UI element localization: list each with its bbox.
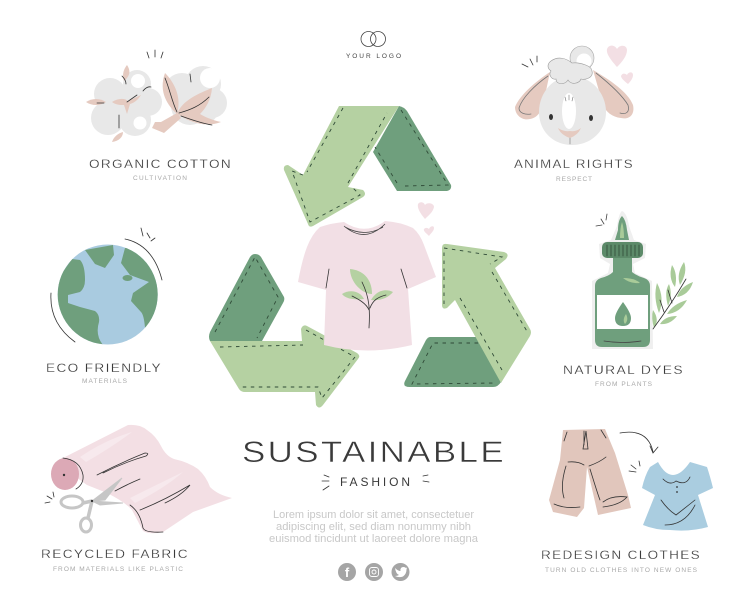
body text [269, 509, 479, 545]
title: SUSTAINABLE [242, 436, 506, 469]
icon: sheep [515, 46, 633, 145]
icon: blue blouse [642, 462, 713, 531]
logo: YOUR LOGO [346, 53, 401, 60]
icon: facebook: f [345, 565, 350, 580]
subtitle: FASHION [340, 475, 410, 489]
heading: redesign clothes: REDESIGN CLOTHES [541, 548, 701, 562]
caption: from materials like plastic: FROM MATERIALS LIKE PLASTIC [53, 566, 183, 573]
icon: instagram [365, 563, 383, 581]
title [242, 436, 506, 490]
body text: Lorem ipsum dolor sit amet, consectetuer [273, 509, 474, 521]
icon: hearts [607, 46, 633, 84]
icon: dye bottle [592, 211, 693, 349]
icon: fabric roll and scissors [45, 425, 232, 533]
arrow: top [284, 106, 451, 227]
icon: globe [50, 228, 175, 345]
icon: t-shirt with leaf [298, 202, 436, 350]
icon: pants [549, 429, 631, 517]
heading: eco friendly: ECO FRIENDLY [46, 361, 162, 375]
icon: branch [652, 262, 693, 329]
arrow: right [404, 244, 531, 387]
icon: twitter [392, 563, 410, 581]
panel: animal rights [514, 46, 634, 183]
caption: turn old clothes into new ones: TURN OLD CLOTHES INTO NEW ONES [545, 567, 698, 574]
icon: cotton bolls [86, 50, 227, 142]
icon: hearts above shirt [418, 202, 434, 236]
body text: euismod tincidunt ut laoreet dolore magna [269, 533, 479, 545]
heading: organic cotton: ORGANIC COTTON [89, 157, 232, 171]
caption: materials: MATERIALS [82, 378, 128, 385]
panel: eco friendly [47, 228, 162, 383]
caption: from plants: FROM PLANTS [595, 381, 653, 388]
caption: respect: RESPECT [556, 176, 592, 183]
caption: cultivation: CULTIVATION [133, 175, 187, 182]
panel: redesign clothes [541, 429, 713, 574]
panel: natural dyes [563, 211, 693, 388]
heading: animal rights: ANIMAL RIGHTS [514, 157, 634, 171]
recycling arrows [209, 106, 531, 408]
heading: recycled fabric: RECYCLED FABRIC [41, 547, 189, 561]
icon: scissors [61, 478, 123, 532]
body text: adipiscing elit, sed diam nonummy nibh [276, 521, 471, 533]
arrow: bottom left [209, 254, 359, 408]
panel: recycled fabric [41, 425, 232, 573]
panel: organic cotton [86, 50, 232, 182]
social icons [338, 563, 410, 581]
heading: natural dyes: NATURAL DYES [563, 363, 684, 377]
leaf motif [342, 269, 393, 328]
arrow: pants to shirt [620, 432, 658, 472]
logo [346, 32, 401, 60]
